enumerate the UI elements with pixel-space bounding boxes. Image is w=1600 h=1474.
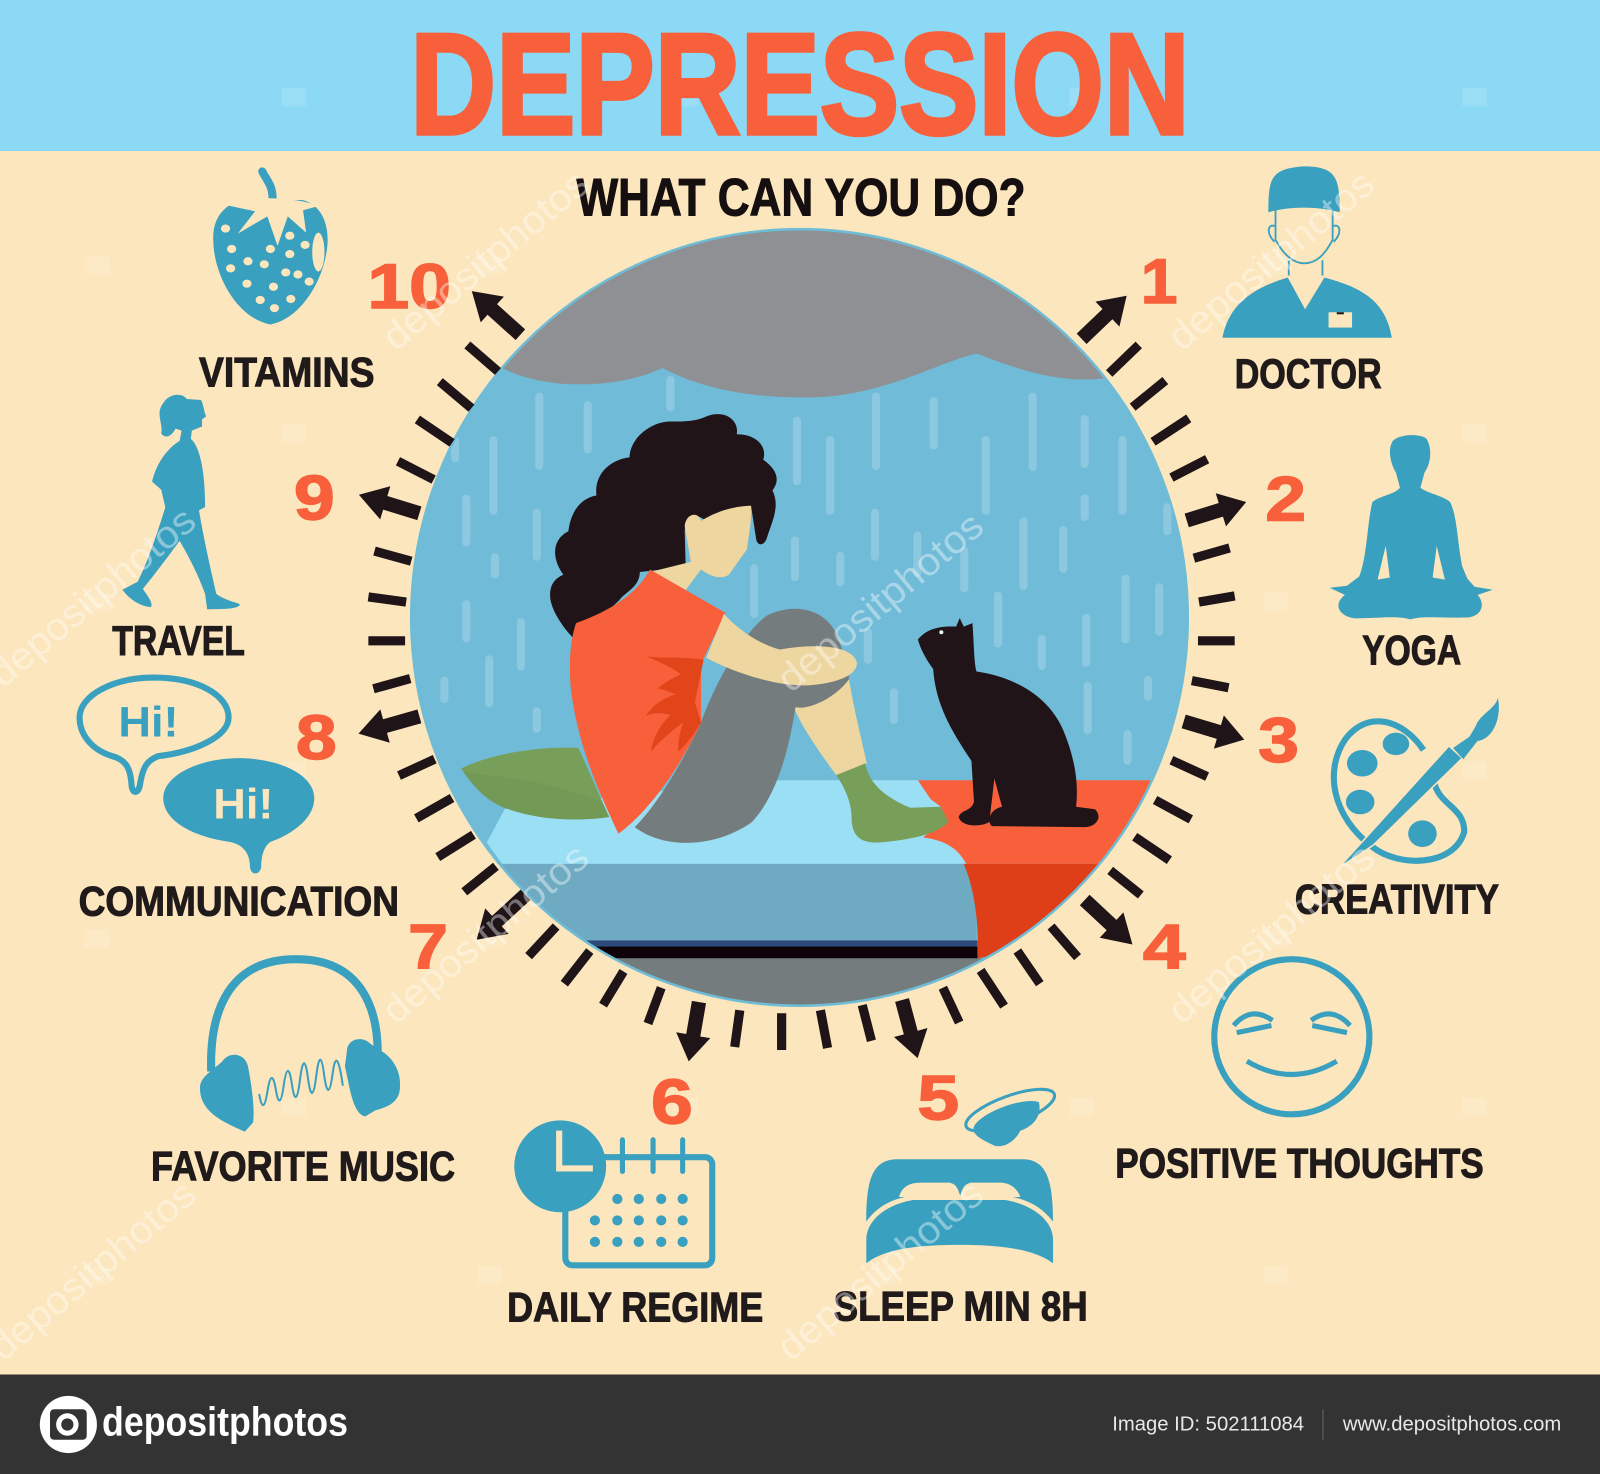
arrow 8 [354,700,424,750]
number 2: 2 [1265,464,1306,534]
label: doctor: DOCTOR [1235,350,1382,397]
lower leg [793,679,867,775]
arrow 2 [1182,485,1251,537]
watermarks: depositphotos [769,1172,992,1369]
shirt [570,570,726,834]
pillow [461,748,609,819]
sock [836,763,948,843]
icon: clock and calendar [514,1120,712,1265]
number 8: 8 [296,703,337,773]
floor [616,958,983,1004]
image id: Image ID: 502111084 [1112,1414,1304,1436]
circle border [411,229,1188,1006]
footer logo text: depositphotos [102,1399,348,1445]
arrow 3 [1179,705,1249,756]
subtitle: WHAT CAN YOU DO? [577,168,1026,227]
bed top [487,780,977,864]
footer bar [0,1374,1600,1474]
rain streaks [444,380,1167,761]
label: sleep: SLEEP MIN 8H [834,1282,1088,1329]
icon: yoga [1330,435,1493,619]
label: daily regime: DAILY REGIME [507,1283,763,1330]
arrow 10 [460,278,532,348]
number 3: 3 [1258,706,1299,776]
label: creativity: CREATIVITY [1295,875,1499,922]
title: DEPRESSION [410,5,1190,165]
circular scene: girl and cat in the rain [400,220,1200,1020]
storm cloud [503,230,1104,398]
shirt shadow [646,656,704,752]
icon: doctor [1222,166,1392,338]
icon: walking woman [122,395,240,609]
arrow 7 [465,882,537,953]
arrow 4 [1073,887,1144,957]
watermarks: depositphotos [769,504,992,701]
icon: speech bubbles: Hi! [118,699,179,747]
label: vitamins: VITAMINS [199,349,374,396]
trousers [635,609,849,843]
black cat [918,618,1098,827]
label: communication: COMMUNICATION [79,877,399,924]
icon: smiling face [1214,959,1369,1114]
icon: strawberry [213,171,328,324]
header band [0,0,1600,151]
icon: speech bubbles [80,678,314,873]
label: travel: TRAVEL [112,617,245,664]
red blanket [918,780,1176,958]
arrow 6 [672,999,716,1064]
watermark cameras [85,88,1487,1285]
label: yoga: YOGA [1362,626,1461,673]
icon: headphones [200,959,400,1132]
website: www.depositphotos.com [1342,1414,1561,1436]
label: favorite music: FAVORITE MUSIC [151,1143,455,1190]
number 1: 1 [1141,247,1178,317]
watermarks: depositphotos [1160,835,1383,1032]
bed frame stripe [586,940,978,958]
footer logo icon [40,1396,97,1453]
ring of tick marks [368,345,1235,1050]
number 6: 6 [651,1067,693,1137]
number 10: 10 [367,252,451,322]
arm [706,614,857,685]
watermarks: depositphotos [1160,162,1383,359]
watermarks: depositphotos [374,835,597,1032]
watermarks: depositphotos [374,162,597,359]
icon: sleep mask and bed [866,1081,1059,1263]
hair [550,414,777,641]
arrow 9 [354,478,424,530]
number 4: 4 [1143,912,1186,982]
number 9: 9 [294,463,335,533]
mattress side [502,864,976,940]
arrow 5 [885,996,934,1063]
face and neck [650,506,751,590]
icon: palette and brush [1334,698,1499,864]
arrow 1 [1070,283,1139,351]
number 7: 7 [408,912,448,982]
watermarks [0,162,1383,1369]
icon: speech bubbles: Hi! [213,780,273,828]
number 5: 5 [917,1063,959,1133]
label: positive thoughts: POSITIVE THOUGHTS [1115,1140,1484,1187]
girl [550,414,948,843]
